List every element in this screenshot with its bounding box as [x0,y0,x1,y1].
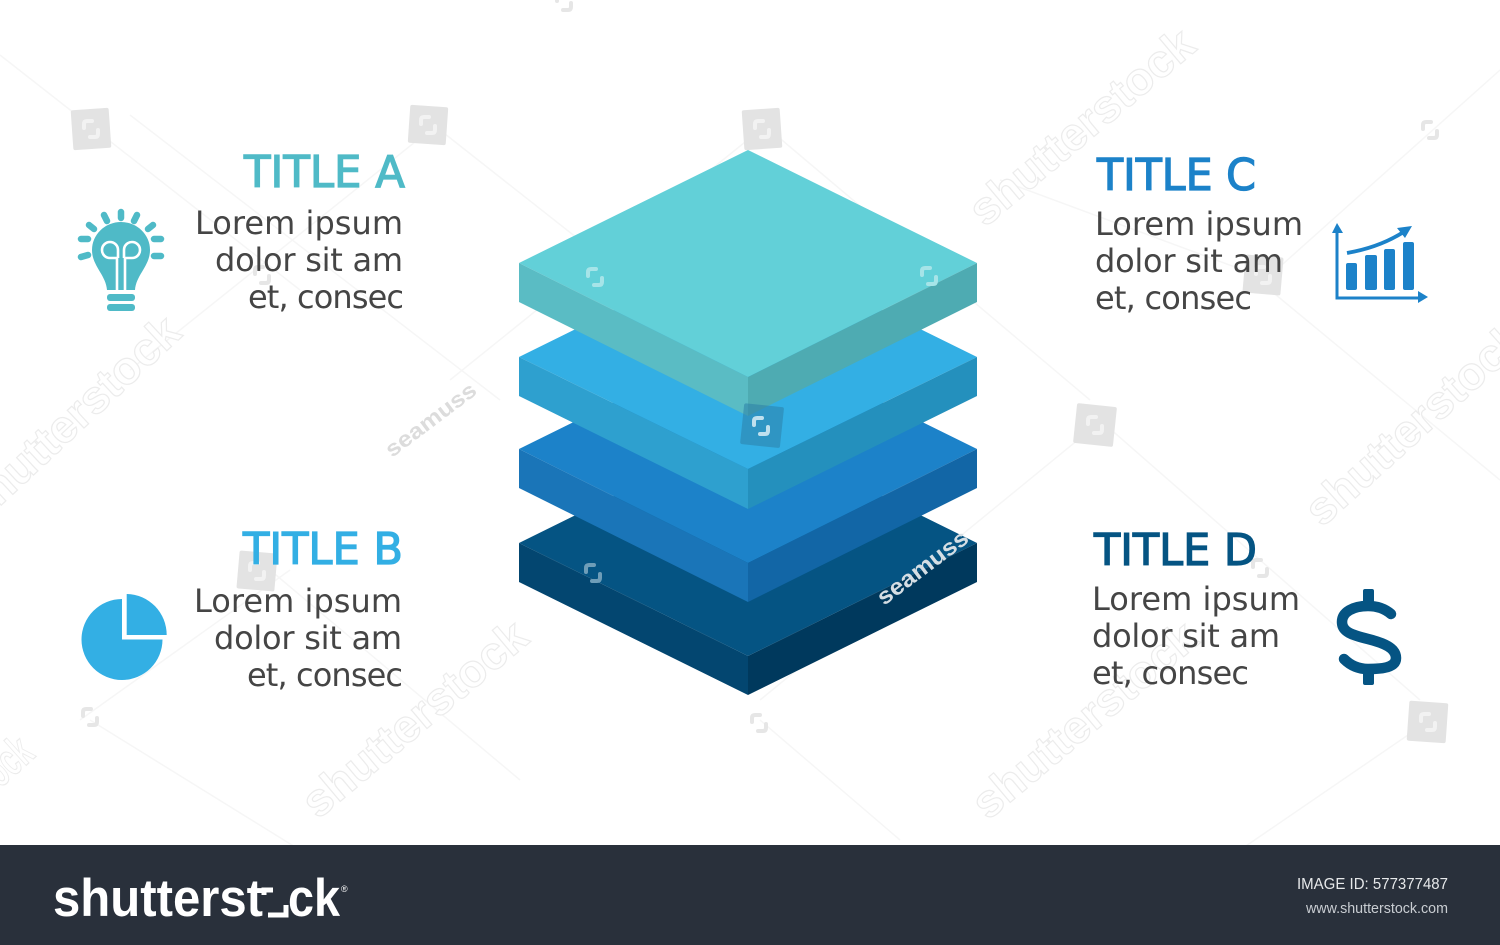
title C: TITLE C [1096,150,1256,201]
body text C: Lorem ipsum [1095,205,1303,243]
watermark marks over the stack [586,268,973,610]
body text D: dolor sit am [1092,617,1280,655]
body text D: Lorem ipsum [1092,580,1300,618]
layer 2: sky blue slab [519,244,977,509]
block A: text [195,147,405,316]
body text C: et, consec [1095,279,1252,317]
isometric layered stack [519,150,977,695]
layer 4: dark navy slab [519,430,977,695]
title B: TITLE B [242,524,403,575]
icon: pie chart [82,594,167,680]
body text B: et, consec [247,656,403,694]
watermark layer: shutterstock [291,609,538,828]
block C: text [1095,150,1303,317]
footer logo: shutterst [53,869,263,928]
body text C: dolor sit am [1095,242,1283,280]
body text B: Lorem ipsum [194,582,402,620]
body text D: et, consec [1092,654,1249,692]
body text B: dolor sit am [214,619,402,657]
block B: text [194,524,403,694]
body text A: dolor sit am [215,241,403,279]
body text A [195,204,404,316]
body text A: Lorem ipsum [195,204,403,242]
icon: light bulb [81,212,161,311]
watermark layer: seamuss [380,377,481,462]
body text D [1092,580,1300,692]
body text B [194,582,403,694]
watermark marks over the stack: seamuss [871,524,973,610]
footer logo: ® [341,884,348,894]
watermark layer: shutterstock [958,17,1205,236]
watermark layer: shutterstock [961,610,1208,829]
footer logo: ck [288,869,340,928]
title D: TITLE D [1093,525,1257,576]
body text C [1095,205,1303,317]
layer 1: teal slab [519,150,977,416]
icon: dollar sign [1342,589,1396,685]
body text A: et, consec [248,278,404,316]
layer 3: mid blue slab [519,336,977,602]
block D: text [1092,525,1300,692]
title A: TITLE A [243,147,405,198]
footer bar [0,845,1500,945]
image id: IMAGE ID: 577377487 [1297,876,1448,893]
icon: growth chart [1332,223,1428,303]
website: www.shutterstock.com [1305,901,1448,917]
